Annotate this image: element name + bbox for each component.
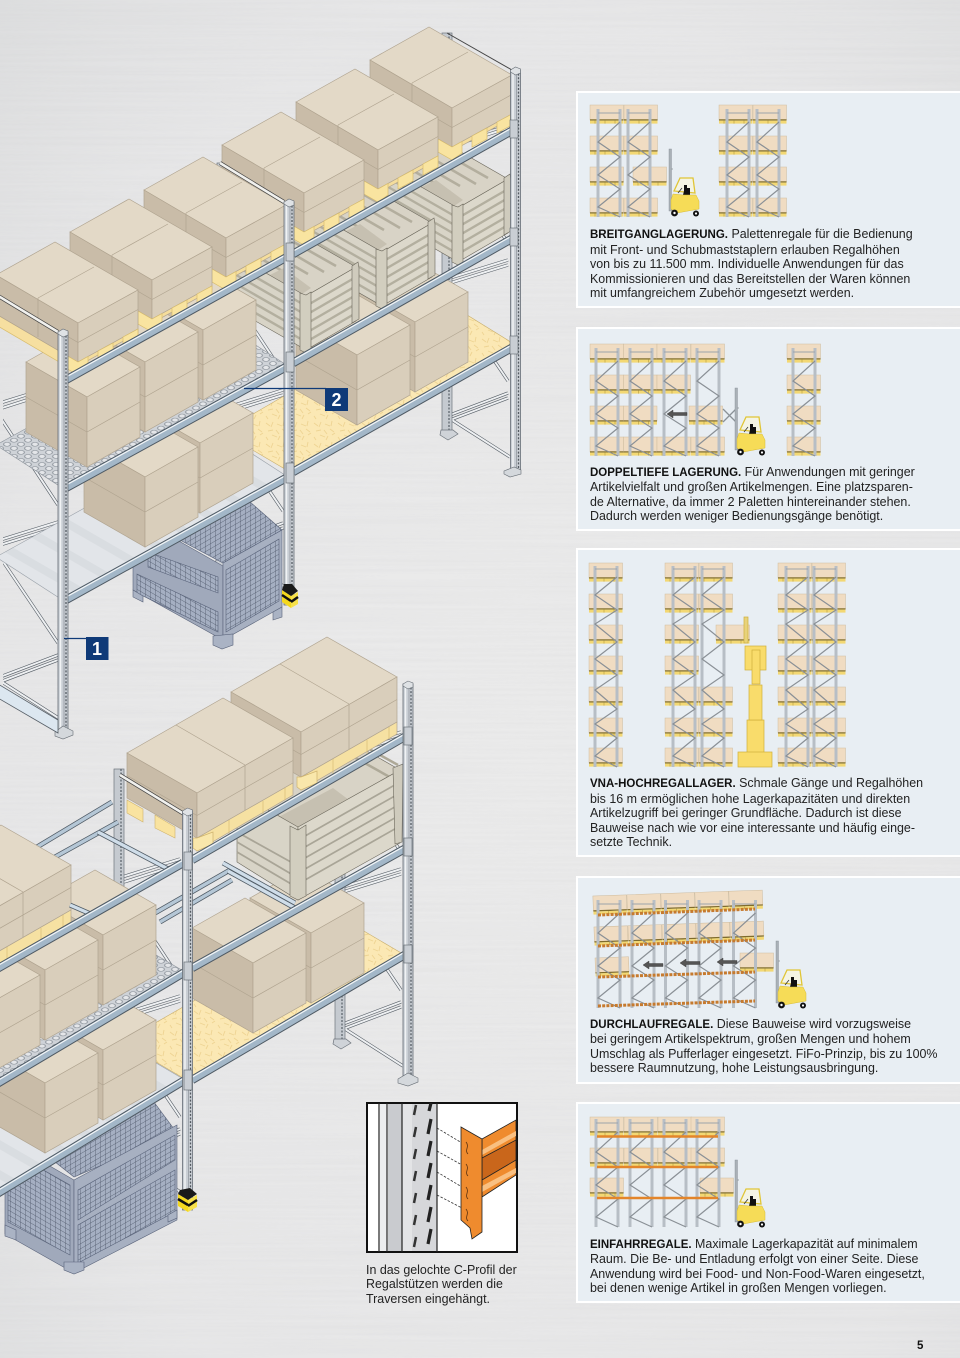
text: Breitganglagerung: Kommissionieren und das Bereitstellen der Waren können — [590, 272, 910, 286]
text: Durchlaufregale: DURCHLAUFREGALE. Diese Bauweise wird vorzugsweise — [590, 1016, 911, 1030]
text: Breitganglagerung: von bis zu 11.500 mm. Individuelle Anwendungen für das — [590, 257, 904, 271]
beam brackets — [184, 727, 412, 1090]
mesh box pallet — [133, 450, 282, 649]
page number: 5 — [917, 1340, 924, 1352]
panel: Doppeltiefe Lagerung background — [576, 327, 960, 531]
upright profile — [379, 1103, 437, 1252]
orange rails — [597, 1136, 718, 1198]
rack frames and rear uprights — [0, 33, 510, 719]
icon: forklift — [735, 1160, 765, 1228]
text: Durchlaufregale — [590, 1016, 938, 1075]
panel: Einfahrregale background — [576, 1102, 960, 1303]
orange beam — [461, 1120, 516, 1239]
rack illustration: upper rack — [0, 27, 521, 739]
mesh box pallet — [5, 1090, 177, 1274]
front uprights — [58, 67, 520, 735]
pallets — [589, 563, 846, 767]
text: Doppeltiefe Lagerung: de Alternative, da immer 2 Paletten hintereinander stehen. — [590, 494, 911, 508]
diagram: Doppeltiefe Lagerung — [590, 344, 820, 456]
rack frames — [594, 566, 838, 767]
rack frames — [596, 900, 757, 1008]
rack frames — [594, 1119, 720, 1227]
callout 1 — [64, 637, 108, 660]
diagram: VNA-Hochregallager — [589, 563, 846, 767]
rack illustration: lower rack — [0, 637, 418, 1274]
beams — [0, 732, 408, 1195]
caption: detail inset — [366, 1262, 517, 1306]
steel shelf deck — [0, 1040, 185, 1195]
beam brackets — [286, 120, 518, 483]
rear beams and cross rails — [37, 802, 232, 922]
text: Einfahrregale: Raum. Die Be- und Entladung erfolgt von einer Seite. Diese — [590, 1252, 918, 1266]
foot plate front right — [504, 467, 521, 477]
text: Breitganglagerung: mit umfangreichem Zubehör umgesetzt werden. — [590, 286, 854, 300]
callout 1: 1 — [92, 639, 102, 659]
perforated shelf deck — [0, 932, 185, 1085]
cross rails — [70, 832, 295, 915]
icon: VNA truck — [738, 617, 772, 767]
text: VNA-Hochregallager — [590, 776, 923, 849]
boxes on bottom shelf — [84, 257, 468, 547]
caption: detail inset: In das gelochte C-Profil der — [366, 1262, 517, 1276]
steel containers — [231, 136, 511, 353]
perforated shelf deck — [0, 322, 288, 489]
front uprights — [182, 681, 413, 1210]
text: Breitganglagerung — [590, 227, 913, 300]
pallets — [590, 1117, 734, 1197]
forks — [723, 409, 736, 422]
text: Durchlaufregale: bei geringem Artikelspektrum, großen Mengen und hohem — [590, 1032, 911, 1046]
text: VNA-Hochregallager: VNA-HOCHREGALLAGER. Schmale Gänge und Regalhöhen — [590, 776, 923, 790]
panel: VNA-Hochregallager background — [576, 548, 960, 857]
boxes on middle shelf — [0, 870, 156, 1075]
left pallet feet — [127, 800, 175, 838]
caption: detail inset: Traversen eingehängt. — [366, 1292, 490, 1306]
rack frames — [594, 348, 816, 456]
text: Einfahrregale — [590, 1236, 925, 1295]
text: Doppeltiefe Lagerung: Artikelvielfalt und großen Artikelmengen. Eine platzsparen- — [590, 480, 913, 494]
detail inset: upright and beam connector — [367, 1103, 517, 1252]
top rail highlight — [120, 775, 184, 814]
text: VNA-Hochregallager: Artikelzugriff bei geringer Grundfläche. Dadurch ist diese — [590, 806, 902, 820]
rack frames and rear uprights — [112, 642, 403, 1193]
text: Einfahrregale: bei denen wenige Artikel in großen Mengen vorliegen. — [590, 1281, 887, 1295]
foot plate front left — [55, 726, 73, 739]
arrow: pallet movement — [667, 410, 687, 418]
panel: Breitganglagerung background — [576, 91, 960, 308]
text: Einfahrregale: EINFAHRREGALE. Maximale Lagerkapazität auf minimalem — [590, 1236, 918, 1250]
palletised boxes on top shelf — [0, 27, 512, 375]
text: VNA-Hochregallager: setzte Technik. — [590, 835, 672, 849]
steel shelf deck — [0, 433, 288, 601]
boxes on bottom shelf — [0, 868, 364, 1153]
panel: Durchlaufregale background — [576, 876, 960, 1084]
callout 2 — [244, 388, 348, 411]
text: Doppeltiefe Lagerung — [590, 464, 915, 523]
icon: forklift — [776, 941, 806, 1008]
chipboard shelf deck — [122, 917, 408, 1082]
caption: detail inset: Regalstützen werden die — [366, 1277, 503, 1291]
icon: forklift — [735, 388, 765, 456]
chipboard shelf deck — [222, 302, 514, 472]
steel container — [237, 735, 403, 900]
foot plate — [398, 1073, 418, 1086]
text: VNA-Hochregallager: bis 16 m ermöglichen hohe Lagerkapazitäten und direkten — [590, 792, 910, 806]
corner guard — [178, 1188, 197, 1212]
text: Doppeltiefe Lagerung: Dadurch werden weniger Bedienungsgänge benötigt. — [590, 509, 883, 523]
pallets — [590, 344, 820, 456]
corner guard — [282, 584, 298, 608]
top rails — [0, 33, 512, 332]
diagram: Breitganglagerung — [590, 105, 786, 217]
top rail — [120, 775, 184, 814]
beams — [64, 126, 515, 601]
moving pallet — [740, 953, 774, 972]
callout 2: 2 — [331, 390, 342, 410]
dashed guide lines — [437, 1128, 462, 1208]
pallets — [590, 105, 786, 217]
text: Breitganglagerung: mit Front- und Schubmaststaplern erlauben Regalhöhen — [590, 242, 900, 256]
text: Durchlaufregale: bessere Raumnutzung, hohe Leistungsausbringung. — [590, 1061, 878, 1075]
text: Durchlaufregale: Umschlag als Pufferlager eingesetzt. FiFo-Prinzip, bis zu 100% — [590, 1046, 938, 1060]
arrows: pallet flow — [643, 958, 737, 969]
pallets — [593, 890, 765, 977]
text: VNA-Hochregallager: Bauweise nach wie vor eine interessante und häufig einge- — [590, 820, 915, 834]
diagram: Einfahrregale — [590, 1117, 765, 1228]
diagram: Durchlaufregale — [593, 890, 806, 1008]
icon: forklift — [669, 149, 699, 216]
floor brace — [0, 684, 58, 733]
palletised boxes on top shelf — [0, 637, 397, 978]
boxes on middle shelf — [26, 265, 256, 467]
rack frames — [596, 109, 780, 217]
text: Einfahrregale: Anwendung wird bei Food- und Non-Food-Waren eingesetzt, — [590, 1266, 925, 1280]
roller tracks — [598, 909, 755, 1006]
text: Breitganglagerung: BREITGANGLAGERUNG. Palettenregale für die Bedienung — [590, 227, 913, 241]
text: Doppeltiefe Lagerung: DOPPELTIEFE LAGERUNG. Für Anwendungen mit geringer — [590, 464, 915, 478]
